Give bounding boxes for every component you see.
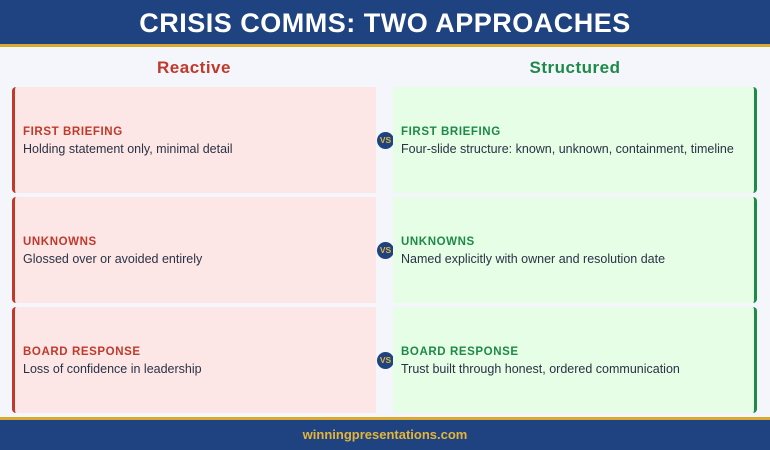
card: structured unknowns: Named explicitly with owner and resolution date xyxy=(401,252,665,266)
heading: structured: Structured xyxy=(530,58,620,77)
card: structured board response xyxy=(393,307,757,413)
card: structured board response: Trust built through honest, ordered communication xyxy=(401,362,680,376)
card: reactive unknowns: Glossed over or avoided entirely xyxy=(23,252,202,266)
vs badge 1: VS xyxy=(380,135,391,145)
title: CRISIS COMMS: TWO APPROACHES xyxy=(139,8,631,38)
vs badge 1 xyxy=(377,132,394,149)
card: reactive unknowns: UNKNOWNS xyxy=(23,236,97,248)
card: structured first briefing: Four-slide structure: known, unknown, containment, timeline xyxy=(401,142,734,156)
vs badge 3 xyxy=(377,352,394,369)
card: structured first briefing: FIRST BRIEFING xyxy=(401,126,501,138)
card: reactive unknowns xyxy=(12,197,376,303)
card: structured first briefing xyxy=(393,87,757,193)
card: reactive first briefing: Holding statement only, minimal detail xyxy=(23,142,233,156)
heading: reactive: Reactive xyxy=(157,58,231,77)
card: structured unknowns xyxy=(393,197,757,303)
card: reactive board response xyxy=(12,307,376,413)
footer xyxy=(0,417,770,450)
vs badge 3: VS xyxy=(380,355,391,365)
card: reactive board response: Loss of confidence in leadership xyxy=(23,362,202,376)
card: reactive first briefing xyxy=(12,87,376,193)
card: reactive board response: BOARD RESPONSE xyxy=(23,346,141,358)
vs badge 2 xyxy=(377,242,394,259)
vs badge 2: VS xyxy=(380,245,391,255)
card: reactive first briefing: FIRST BRIEFING xyxy=(23,126,123,138)
card: structured unknowns: UNKNOWNS xyxy=(401,236,475,248)
title xyxy=(0,0,770,47)
footer: winningpresentations.com xyxy=(303,427,467,442)
card: structured board response: BOARD RESPONSE xyxy=(401,346,519,358)
